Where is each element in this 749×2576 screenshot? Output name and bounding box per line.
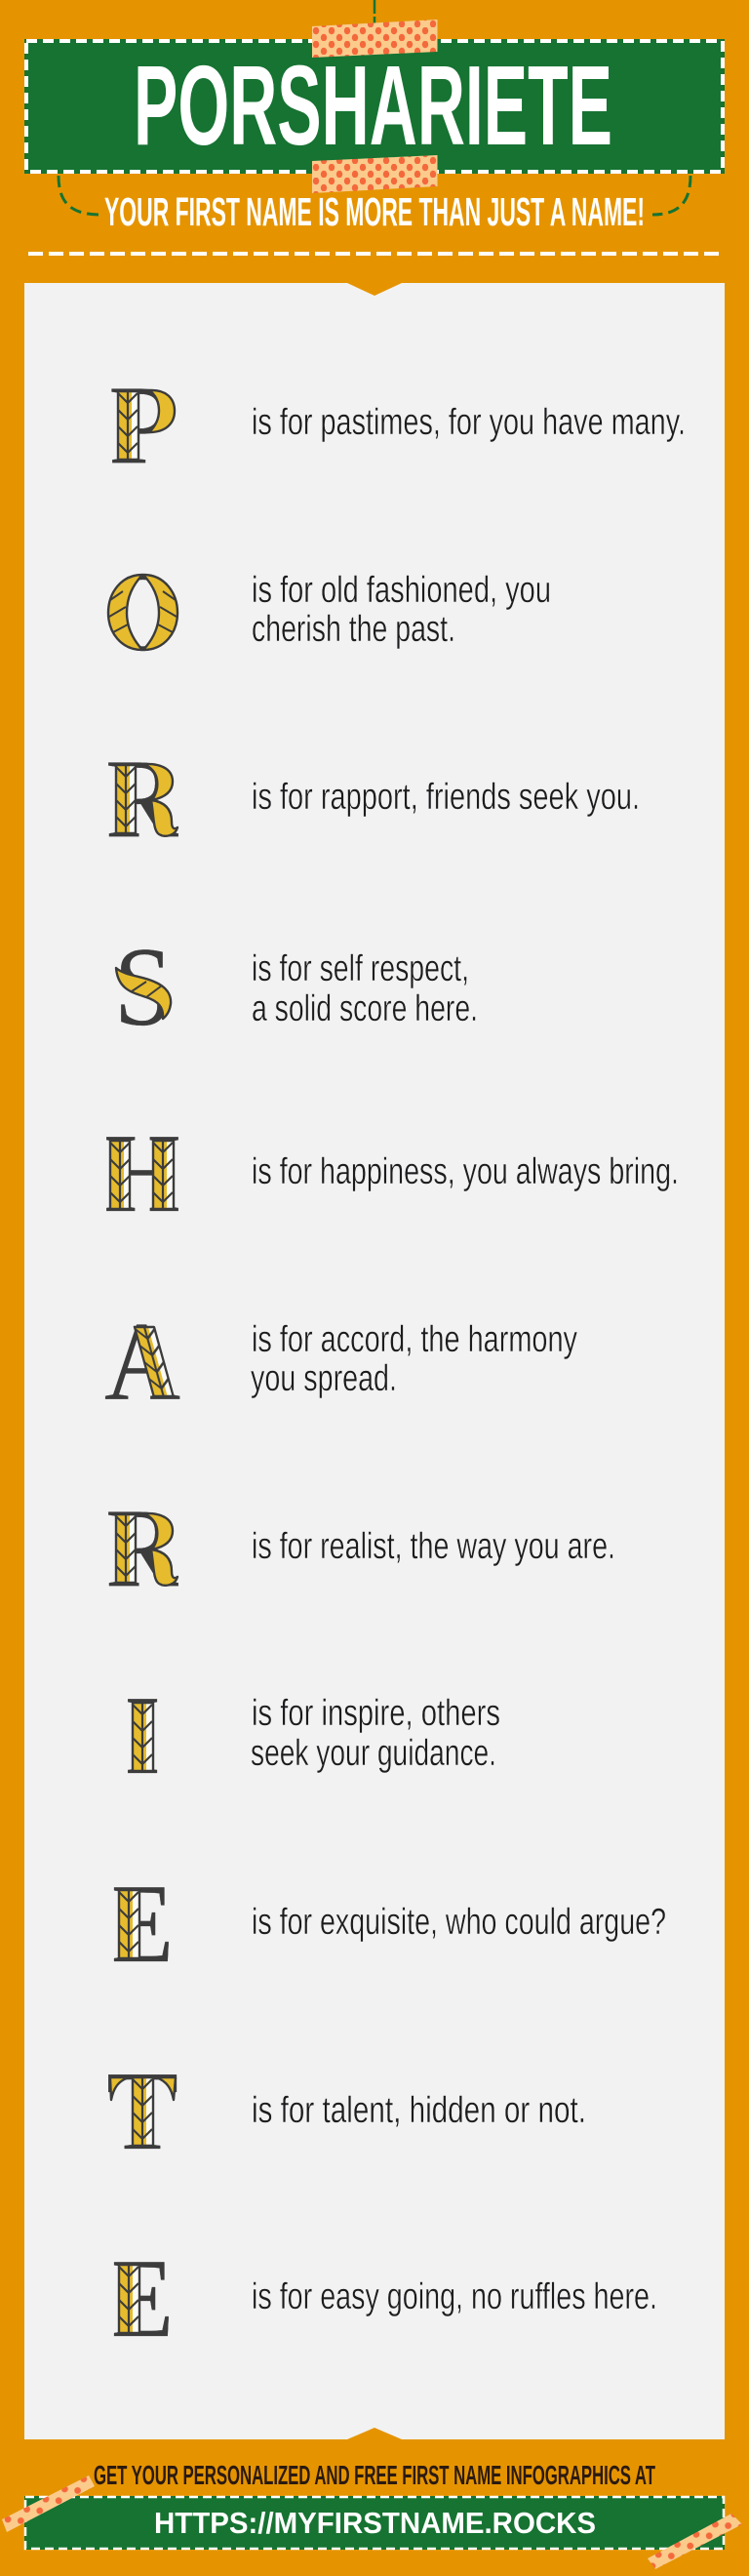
panel: letters xyxy=(24,283,725,2439)
text: S: is for self respect, xyxy=(252,948,469,989)
text: R: is for realist, the way you are. xyxy=(252,1526,615,1567)
tape: footer left xyxy=(2,2475,95,2532)
footer url: HTTPS://MYFIRSTNAME.ROCKS xyxy=(154,2506,596,2540)
text: I: is for inspire, others xyxy=(252,1693,500,1734)
text: S xyxy=(252,948,478,1029)
letter T: T xyxy=(106,2049,178,2174)
tape: top xyxy=(312,20,437,58)
text: O xyxy=(252,570,551,650)
text: A: you spread. xyxy=(251,1358,397,1399)
curly connector: left xyxy=(59,176,100,215)
text: S: a solid score here. xyxy=(252,988,478,1029)
letter E: E xyxy=(111,2236,174,2361)
text: T: is for talent, hidden or not. xyxy=(252,2090,586,2131)
letter O: O xyxy=(107,550,178,675)
dashed divider xyxy=(28,252,721,256)
letter P: P xyxy=(108,363,175,488)
letter E: E xyxy=(111,1862,174,1987)
curly connector: right xyxy=(652,176,690,215)
text: R: is for rapport, friends seek you. xyxy=(252,777,640,818)
letter S: S xyxy=(114,925,173,1050)
letter I: I xyxy=(124,1673,161,1798)
text: O: is for old fashioned, you xyxy=(252,570,551,611)
tape: bottom xyxy=(312,155,437,193)
letter A: A xyxy=(104,1300,180,1425)
tape: footer right xyxy=(648,2514,742,2569)
hanging string xyxy=(374,0,375,25)
text: A: is for accord, the harmony xyxy=(252,1319,577,1360)
text: I: seek your guidance. xyxy=(251,1733,496,1774)
text: I xyxy=(251,1693,500,1774)
footer prompt: GET YOUR PERSONALIZED AND FREE FIRST NAME INFOGRAPHICS AT xyxy=(94,2460,655,2490)
letter H: H xyxy=(103,1111,181,1236)
text: O: cherish the past. xyxy=(252,609,455,650)
text: A xyxy=(251,1319,577,1399)
letter R: R xyxy=(105,1486,179,1611)
letter R: R xyxy=(105,737,179,862)
footer banner xyxy=(24,2496,725,2550)
title banner xyxy=(24,39,725,174)
